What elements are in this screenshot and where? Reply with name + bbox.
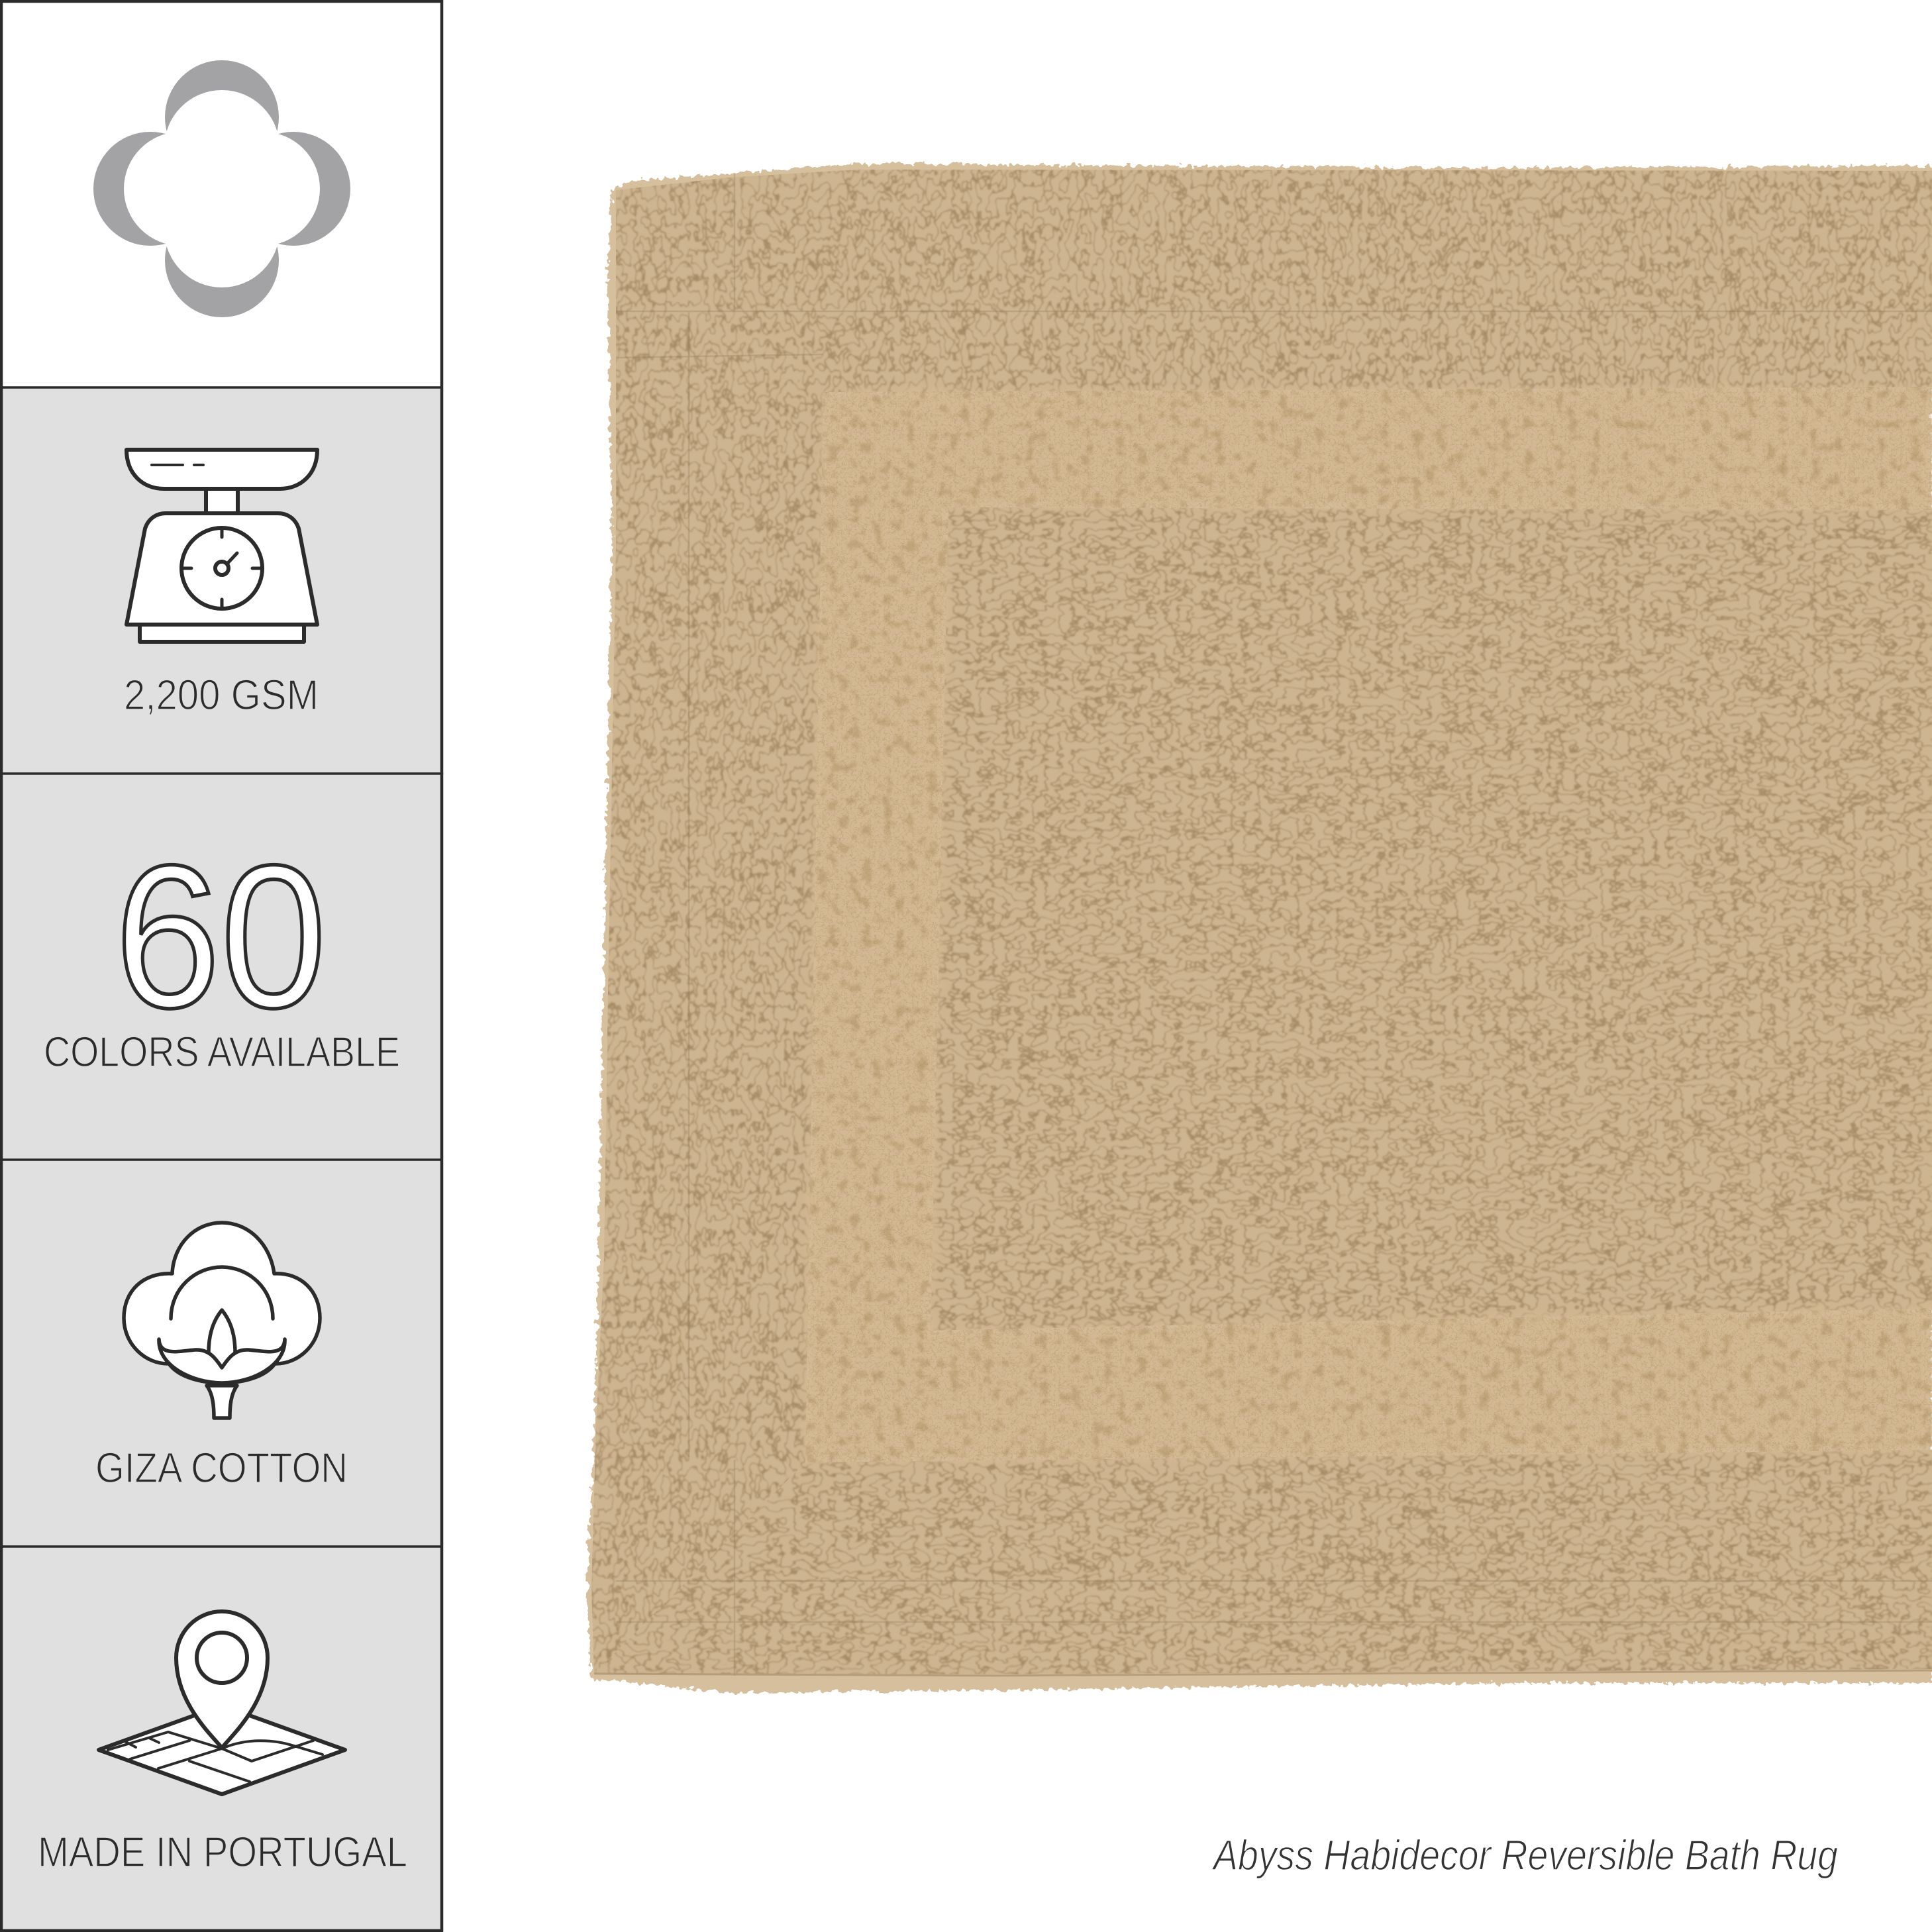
panel: colors cell [1, 774, 442, 1160]
panel: logo cell [1, 1, 442, 387]
icon: quatrefoil brand logo [93, 60, 350, 317]
panel: weight cell [1, 387, 442, 774]
label: giza cotton: GIZA COTTON [95, 1444, 348, 1492]
panel: cotton cell [1, 1160, 442, 1547]
label: colors available: COLORS AVAILABLE [44, 1028, 400, 1076]
label: made in portugal: MADE IN PORTUGAL [38, 1828, 407, 1876]
icon: kitchen weighing scale [127, 450, 317, 642]
icon: cotton boll [124, 1223, 320, 1418]
panel: product specification column [1, 1, 442, 1931]
label: fabric weight: 2,200 GSM [124, 671, 319, 719]
panel: origin cell [1, 1547, 442, 1931]
product photo: beige looped bath rug [583, 159, 1932, 1693]
icon: map with location pin [99, 1611, 345, 1794]
number: sixty colours: 60 [115, 823, 327, 1050]
caption: product name: Abyss Habidecor Reversible Bath Rug [1211, 1831, 1838, 1879]
